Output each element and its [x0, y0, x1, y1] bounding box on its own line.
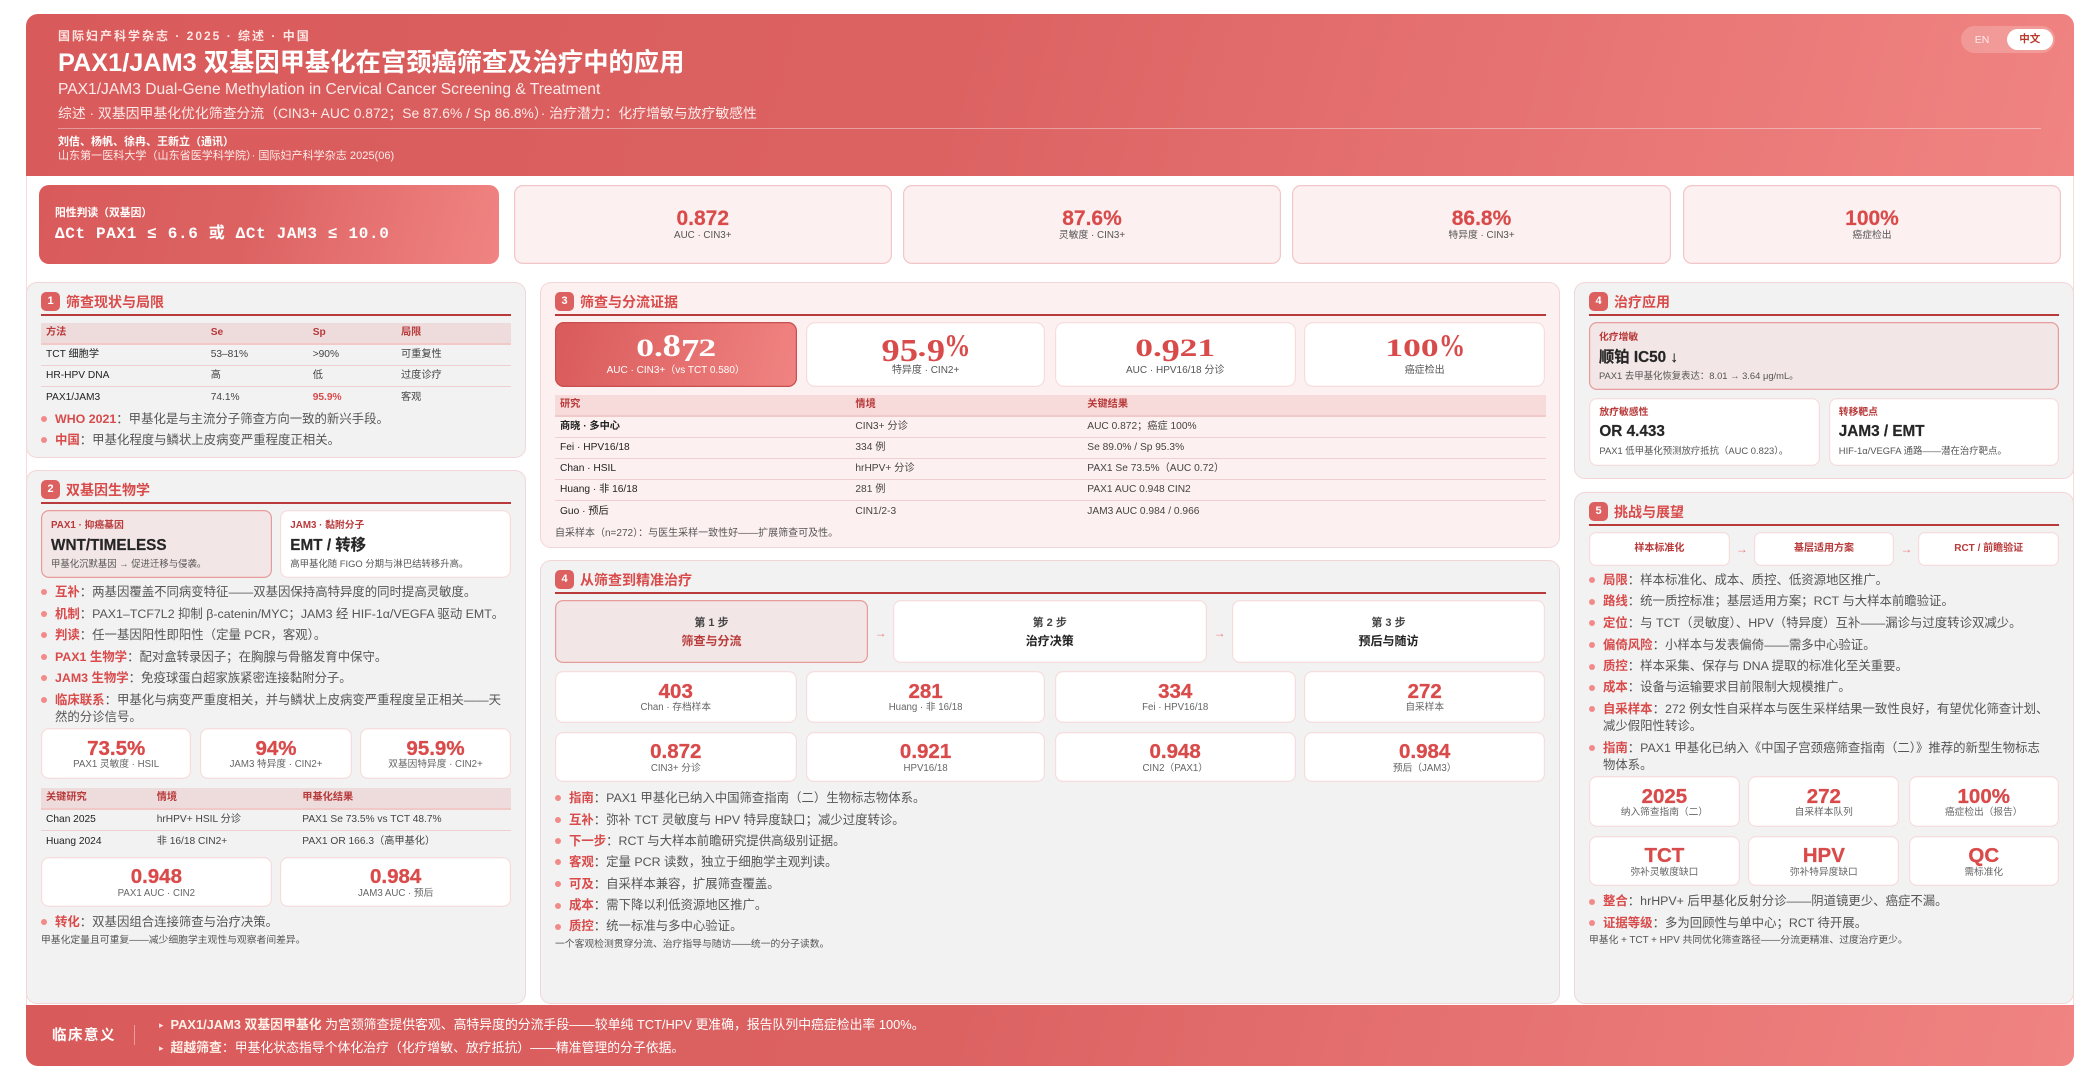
- stat: 2025: 纳入筛查指南（二）: [1621, 807, 1708, 818]
- stat: 0.948: CIN2（PAX1）: [1142, 763, 1208, 774]
- heading: [1589, 292, 2059, 316]
- stat: 272: [1304, 671, 1545, 723]
- stat: 100: 100%: [1958, 785, 2010, 808]
- heading 1: [41, 292, 511, 316]
- card: chemo sensitization: PAX1 去甲基化恢复表达：8.01 → 3.64 μg/mL。: [1599, 370, 1799, 381]
- bullet: complement: 互补：弥补 TCT 灵敏度与 HPV 特异度缺口；减少过度转诊。: [569, 812, 905, 826]
- stat: 0.921: [806, 732, 1045, 782]
- bullet: self sampling: [1589, 701, 2048, 735]
- affiliation: 山东第一医科大学（山东省医学科学院）· 国际妇产科学杂志 2025(06): [58, 150, 394, 162]
- table: studies: 334 例: [855, 442, 885, 453]
- stat: 0.948: [41, 857, 272, 907]
- flow: RCT: RCT / 前瞻验证: [1954, 543, 2023, 554]
- arrow: →: [1214, 626, 1226, 640]
- card: metastasis target: HIF-1α/VEGFA 通路——潜在治疗靶点。: [1839, 445, 2007, 456]
- big stat: 0.921: 0. 21: [1135, 335, 1215, 362]
- bullet: mechanism: 机制：PAX1–TCF7L2 抑制 β-catenin/MYC；JAM3 经 HIF-1α/VEGFA 驱动 EMT。: [55, 607, 504, 621]
- table: screening methods: PAX1/JAM3: [46, 392, 100, 402]
- step 1: 第 1 步: [694, 617, 729, 629]
- footer line 2: 超越筛查：甲基化状态指导个体化治疗（化疗增敏、放疗抵抗）——精准管理的分子依据。: [170, 1040, 684, 1055]
- step 1: [555, 600, 868, 663]
- heading 2: [41, 480, 511, 504]
- table: screening methods: 74.1%: [211, 392, 240, 402]
- bullet: self sampling: 减少假阳性转诊。: [1603, 719, 1702, 733]
- stat: 73.5: 73.5%: [87, 737, 145, 760]
- kpi: positivity criterion: [39, 185, 499, 264]
- table: studies: 研究: [560, 399, 580, 410]
- bullet: position: 定位：与 TCT（灵敏度）、HPV（特异度）互补——漏诊与过度转诊双减少。: [1603, 616, 2022, 630]
- heading 5: [1589, 502, 2059, 526]
- bullet: complement: 互补：两基因覆盖不同病变特征——双基因保持高特异度的同时提高灵敏度。: [55, 585, 476, 599]
- stat: 94: 94%: [255, 737, 296, 760]
- note: 一个客观检测贯穿分流、治疗指导与随访——统一的分子读数。: [555, 939, 829, 950]
- stat: 403: Chan · 存档样本: [640, 702, 711, 713]
- heading 3: 筛查与分流证据: [580, 294, 678, 310]
- step 2: 第 2 步: [1033, 617, 1067, 629]
- table: studies: PAX1 AUC 0.948 CIN2: [1087, 484, 1191, 495]
- flow: primary care: [1754, 532, 1894, 566]
- bullet: quality: 质控：样本采集、保存与 DNA 提取的标准化至关重要。: [1603, 659, 1908, 673]
- big stat: 0.921: AUC · HPV16/18 分诊: [1126, 365, 1224, 376]
- heading 5: 5: [1595, 505, 1602, 517]
- authors: 刘佶、杨帆、徐冉、王新立（通讯）: [58, 136, 234, 148]
- table: screening methods: HR-HPV DNA: [46, 370, 109, 381]
- bullet: JAM3 biology: JAM3 生物学：免疫球蛋白超家族紧密连接黏附分子。: [55, 671, 352, 685]
- stat: 0.984: 0.984: [1399, 740, 1450, 763]
- kpi: sensitivity: 灵敏度 · CIN3+: [1059, 230, 1125, 241]
- panel: 2 dual gene biology: [26, 470, 526, 1004]
- toggle active 中文: 中文: [2019, 33, 2040, 45]
- panel: 3 screening evidence: [540, 282, 1560, 548]
- stat: 0.948: PAX1 AUC · CIN2: [118, 888, 195, 899]
- big stat: 0.921: [1055, 322, 1296, 387]
- heading 1: 筛查现状与局限: [66, 294, 164, 310]
- bullet: clinical link: 然的分诊信号。: [55, 710, 142, 724]
- table: screening methods: 95.9%: [313, 392, 342, 402]
- card: radiotherapy sensitivity: [1589, 398, 1820, 466]
- summary line: 综述 · 双基因甲基化优化筛查分流（CIN3+ AUC 0.872；Se 87.6% / Sp 86.8%）· 治疗潜力：化疗增敏与放疗敏感性: [58, 105, 757, 121]
- table: studies: CIN3+ 分诊: [855, 421, 908, 432]
- stat: 0.984: [1304, 732, 1545, 782]
- stat: QC: 需标准化: [1964, 867, 2003, 878]
- bullet: route: 路线：统一质控标准；基层适用方案；RCT 与大样本前瞻验证。: [1603, 594, 1954, 608]
- criterion label: 阳性判读（双基因）: [55, 207, 152, 219]
- step 2: 治疗决策: [1026, 634, 1074, 648]
- big stat: 0.872: AUC · CIN3+（vs TCT 0.580）: [607, 365, 745, 376]
- table: key studies: PAX1 OR 166.3（高甲基化）: [302, 836, 435, 846]
- footer: clinical significance: [26, 1005, 2074, 1066]
- table: studies: Se 89.0% / Sp 95.3%: [1087, 442, 1184, 453]
- table: screening methods: Sp: [313, 327, 326, 338]
- heading 2: 2: [47, 483, 54, 495]
- kpi: sensitivity: [903, 185, 1281, 264]
- bullet: bias: 偏倚风险：小样本与发表偏倚——需多中心验证。: [1603, 638, 1876, 652]
- table: key studies: 非 16/18 CIN2+: [157, 836, 227, 846]
- table: key studies: 甲基化结果: [302, 792, 353, 803]
- card: metastasis target: JAM3 / EMT: [1839, 423, 1925, 440]
- stat: 100: 癌症检出（报告）: [1945, 807, 2022, 818]
- step 3: [1232, 600, 1545, 663]
- bullet: WHO: WHO 2021：甲基化是与主流分子筛查方向一致的新兴手段。: [55, 412, 389, 426]
- arrow: →: [1736, 542, 1748, 556]
- footer arrow: ▸: [159, 1043, 164, 1053]
- stat: 334: [1055, 671, 1296, 723]
- bullet: self sampling: 自采样本：272 例女性自采样本与医生采样结果一致性良好，有望优化筛查计划、: [1603, 702, 2048, 716]
- card: JAM3: EMT / 转移: [290, 537, 366, 554]
- bullet: interpretation: 判读：任一基因阳性即阳性（定量 PCR，客观）。: [55, 628, 326, 642]
- card: radiotherapy sensitivity: OR 4.433: [1599, 423, 1665, 440]
- note: 甲基化定量且可重复——减少细胞学主观性与观察者间差异。: [41, 935, 306, 946]
- table: screening methods: 客观: [401, 392, 421, 402]
- stat: 2025: 2025: [1642, 785, 1687, 808]
- card: JAM3: [280, 510, 511, 578]
- flow: RCT: [1918, 532, 2059, 566]
- card: chemo sensitization: 顺铂 IC50 ↓: [1599, 349, 1678, 366]
- stat: TCT: TCT: [1644, 844, 1684, 867]
- table: key studies: PAX1 Se 73.5% vs TCT 48.7%: [302, 814, 442, 825]
- table: screening methods: 局限: [401, 327, 421, 338]
- step 3: 预后与随访: [1358, 634, 1418, 648]
- panel: 4 treatment application: [1574, 282, 2074, 479]
- kpi: AUC: 0.872: [676, 207, 729, 230]
- bullet: guideline: 物体系。: [1603, 758, 1653, 772]
- big stat: 0.872: 7: [680, 332, 698, 368]
- stat: 95.9: [360, 728, 511, 779]
- bullet: limits: 局限：样本标准化、成本、质控、低资源地区推广。: [1603, 572, 1888, 586]
- stat: 0.984: 0.984: [370, 865, 421, 888]
- table: screening methods: [41, 323, 511, 402]
- heading 4: 从筛查到精准治疗: [580, 572, 692, 588]
- bullet: integration: 整合：hrHPV+ 后甲基化反射分诊——阴道镜更少、癌症不漏。: [1603, 894, 1948, 908]
- stat: 2025: [1589, 776, 1740, 827]
- stat: 272: [1748, 776, 1899, 827]
- bullet: evidence level: 证据等级：多为回顾性与单中心；RCT 待开展。: [1603, 916, 1867, 930]
- stat: 403: 403: [659, 680, 693, 703]
- big stat: 0.921: 9: [1162, 332, 1180, 368]
- card: metastasis target: 转移靶点: [1839, 407, 1878, 418]
- kpi: specificity: [1292, 185, 1671, 264]
- panel: 4 from screening to precision treatment: [540, 560, 1560, 1004]
- kpi: sensitivity: 87.6%: [1062, 207, 1122, 230]
- big stat: 95.9: 9: [926, 332, 944, 368]
- stat: 272: 自采样本: [1405, 702, 1444, 713]
- big stat: 100: %: [1438, 327, 1464, 363]
- table: screening methods: 53–81%: [211, 349, 248, 360]
- stat: 0.921: 0.921: [900, 740, 951, 763]
- table: studies: AUC 0.872；癌症 100%: [1087, 421, 1197, 432]
- step 1: 筛查与分流: [681, 634, 742, 648]
- panel: 1 screening status: [26, 282, 526, 458]
- stat: 0.948: 0.948: [1150, 740, 1201, 763]
- big stat: 0.872: 8: [662, 327, 680, 363]
- table: studies: 281 例: [855, 484, 885, 495]
- table: key studies: Huang 2024: [46, 836, 102, 846]
- stat: 95.9: 95.9%: [406, 737, 465, 760]
- table: studies: hrHPV+ 分诊: [855, 463, 915, 474]
- table: screening methods: 可重复性: [401, 349, 442, 360]
- english subtitle: PAX1/JAM3 Dual-Gene Methylation in Cervical Cancer Screening & Treatment: [58, 81, 600, 98]
- bullet: China: 中国：甲基化程度与鳞状上皮病变严重程度正相关。: [55, 432, 340, 446]
- card: chemo sensitization: [1589, 322, 2059, 390]
- criterion formula: ΔCt PAX1 ≤ 6.6 或 ΔCt JAM3 ≤ 10.0: [55, 225, 389, 243]
- heading 1: 1: [47, 295, 54, 307]
- heading: 治疗应用: [1614, 294, 1670, 310]
- bullet: objective: 客观：定量 PCR 读数，独立于细胞学主观判读。: [569, 855, 837, 869]
- table: studies: Guo · 预后: [560, 506, 609, 516]
- table: screening methods: Se: [211, 327, 223, 338]
- big stat: 95.9: 特异度 · CIN2+: [892, 365, 959, 376]
- heading 3: [555, 292, 1546, 316]
- big stat: 100: [1304, 322, 1545, 387]
- kpi: AUC: AUC · CIN3+: [674, 230, 731, 241]
- stat: TCT: 弥补灵敏度缺口: [1630, 867, 1698, 878]
- bullet: quality: 质控：统一标准与多中心验证。: [569, 919, 742, 933]
- big stat: 95.9: %: [943, 327, 970, 363]
- stat: 0.948: 0.948: [131, 865, 182, 888]
- table: studies: Chan · HSIL: [560, 463, 616, 474]
- flow: primary care: 基层适用方案: [1794, 543, 1854, 554]
- heading 5: 挑战与展望: [1614, 504, 1684, 520]
- card: PAX1: PAX1 · 抑癌基因: [51, 520, 124, 531]
- header banner: [26, 14, 2074, 176]
- bullet: translation: 转化：双基因组合连接筛查与治疗决策。: [55, 915, 278, 929]
- card: radiotherapy sensitivity: 放疗敏感性: [1599, 407, 1648, 418]
- bullet: clinical link: 临床联系：甲基化与病变严重度相关，并与鳞状上皮病变严重程度呈正相关——天: [55, 693, 501, 707]
- card: PAX1: WNT/TIMELESS: [51, 537, 167, 554]
- main title: PAX1/JAM3 双基因甲基化在宫颈癌筛查及治疗中的应用: [58, 49, 684, 77]
- card: metastasis target: [1829, 398, 2059, 466]
- card: JAM3: JAM3 · 黏附分子: [290, 520, 364, 531]
- stat: 281: 281: [908, 680, 943, 703]
- table: screening methods: >90%: [313, 349, 339, 360]
- table: studies: 关键结果: [1087, 399, 1128, 410]
- stat: QC: [1908, 836, 2059, 886]
- table: studies: Huang · 非 16/18: [560, 484, 638, 495]
- table: studies: [555, 395, 1546, 516]
- toggle EN: EN: [1975, 34, 1989, 46]
- stat: 100: [1908, 776, 2059, 827]
- stat: 334: Fei · HPV16/18: [1142, 702, 1208, 713]
- stat: 272: 272: [1807, 785, 1841, 808]
- stat: HPV: [1748, 836, 1899, 886]
- stat: 281: Huang · 非 16/18: [889, 702, 962, 713]
- bullet: guideline: [1589, 740, 2040, 774]
- table: studies: PAX1 Se 73.5%（AUC 0.72）: [1087, 463, 1224, 474]
- note: 甲基化 + TCT + HPV 共同优化筛查路径——分流更精准、过度治疗更少。: [1589, 935, 1908, 946]
- kpi: specificity: 86.8%: [1452, 207, 1511, 230]
- stat: 94: [200, 728, 352, 779]
- stat: 0.984: 预后（JAM3）: [1393, 763, 1456, 774]
- stat: 403: [555, 671, 796, 723]
- big stat: 100: 100: [1385, 335, 1439, 362]
- table: studies: JAM3 AUC 0.984 / 0.966: [1087, 506, 1199, 516]
- flow: sample standardization: [1589, 532, 1730, 566]
- heading 3: 3: [561, 295, 568, 307]
- card: PAX1: 甲基化沉默基因 → 促进迁移与侵袭。: [51, 558, 206, 569]
- big stat: 95.9: 5: [899, 332, 917, 368]
- stat: 0.921: HPV16/18: [904, 763, 948, 774]
- table: studies: CIN1/2-3: [855, 506, 896, 516]
- stat: 94: JAM3 特异度 · CIN2+: [230, 759, 322, 770]
- arrow: →: [875, 626, 887, 640]
- bullet: accessible: 可及：自采样本兼容，扩展筛查覆盖。: [569, 877, 780, 891]
- footer line 1: PAX1/JAM3 双基因甲基化 为宫颈筛查提供客观、高特异度的分流手段——较单纯 TCT/HPV 更准确，报告队列中癌症检出率 100%。: [170, 1017, 925, 1032]
- step 2: [893, 600, 1206, 663]
- table: key studies: Chan 2025: [46, 814, 96, 825]
- table: key studies: 关键研究: [46, 792, 87, 803]
- bullet: cost: 成本：需下降以利低资源地区推广。: [569, 898, 767, 912]
- flow: sample standardization: 样本标准化: [1634, 543, 1684, 554]
- kpi: specificity: 特异度 · CIN3+: [1448, 230, 1515, 241]
- note: 自采样本（n=272）：与医生采样一致性好——扩展筛查可及性。: [555, 528, 838, 539]
- language toggle: [1961, 26, 2055, 53]
- footer label: 临床意义: [52, 1028, 116, 1044]
- big stat: 95.9: .: [917, 335, 926, 362]
- stat: 73.5: PAX1 灵敏度 · HSIL: [73, 759, 159, 770]
- stat: TCT: [1589, 836, 1740, 886]
- table: screening methods: 方法: [46, 327, 66, 338]
- table: key studies: [41, 788, 511, 846]
- stat: 272: 272: [1408, 680, 1442, 703]
- bullet: clinical link: [41, 692, 501, 726]
- stat: 334: 334: [1158, 680, 1192, 703]
- kpi: cancer detection: 100%: [1845, 207, 1899, 230]
- kpi: cancer detection: 癌症检出: [1852, 230, 1892, 241]
- bullet: PAX1 biology: PAX1 生物学：配对盒转录因子；在胸腺与骨骼发育中保守。: [55, 650, 387, 664]
- kpi: cancer detection: [1683, 185, 2061, 264]
- stat: 0.872: [555, 732, 796, 782]
- table: key studies: 情境: [157, 792, 177, 803]
- stat: 281: [806, 671, 1045, 723]
- bullet: guideline: 指南：PAX1 甲基化已纳入《中国子宫颈癌筛查指南（二）》推荐的新型生物标志: [1603, 741, 2040, 755]
- card: chemo sensitization: 化疗增敏: [1599, 332, 1638, 343]
- panel: 5 challenges and outlook: [1574, 492, 2074, 1004]
- bullet: guideline: 指南：PAX1 甲基化已纳入中国筛查指南（二）生物标志物体系。: [569, 791, 925, 805]
- step 3: 第 3 步: [1371, 617, 1406, 629]
- table: studies: Fei · HPV16/18: [560, 442, 630, 453]
- heading 4: 4: [561, 573, 568, 585]
- table: screening methods: 低: [313, 370, 323, 381]
- bullet: next step: 下一步：RCT 与大样本前瞻研究提供高级别证据。: [569, 834, 846, 848]
- footer arrow: ▸: [159, 1020, 164, 1030]
- heading 4: [555, 570, 1546, 594]
- big stat: 0.872: [555, 322, 796, 387]
- stat: HPV: HPV: [1803, 844, 1845, 867]
- stat: HPV: 弥补特异度缺口: [1790, 867, 1858, 878]
- toggle active 中文: [2006, 29, 2053, 50]
- table: key studies: hrHPV+ HSIL 分诊: [157, 814, 241, 825]
- stat: 0.984: JAM3 AUC · 预后: [358, 888, 433, 899]
- stat: 0.948: [1055, 732, 1296, 782]
- stat: QC: QC: [1968, 844, 1999, 867]
- bullet: cost: 成本：设备与运输要求目前限制大规模推广。: [1603, 680, 1851, 694]
- stat: 0.872: 0.872: [650, 740, 701, 763]
- stat: 272: 自采样本队列: [1795, 807, 1853, 818]
- table: screening methods: 高: [211, 370, 221, 381]
- table: studies: 商晓 · 多中心: [560, 421, 620, 432]
- stat: 73.5: [41, 728, 191, 779]
- big stat: 95.9: [806, 322, 1045, 387]
- big stat: 95.9: 9: [882, 332, 900, 368]
- card: JAM3: 高甲基化随 FIGO 分期与淋巴结转移升高。: [290, 558, 468, 569]
- heading: 4: [1595, 295, 1602, 307]
- stat: 95.9: 双基因特异度 · CIN2+: [388, 759, 483, 770]
- card: PAX1: [41, 510, 272, 578]
- big stat: 0.872: 0. 2: [636, 335, 716, 362]
- card: radiotherapy sensitivity: PAX1 低甲基化预测放疗抵抗（AUC 0.823）。: [1599, 445, 1788, 456]
- eyebrow: 国际妇产科学杂志 · 2025 · 综述 · 中国: [58, 29, 311, 43]
- stat: 0.984: [280, 857, 511, 907]
- heading 2: 双基因生物学: [66, 482, 150, 498]
- stat: 0.872: CIN3+ 分诊: [651, 763, 701, 774]
- big stat: 100: 癌症检出: [1405, 365, 1445, 376]
- table: studies: 情境: [855, 399, 876, 410]
- arrow: →: [1900, 542, 1912, 556]
- table: screening methods: 过度诊疗: [401, 370, 442, 381]
- kpi: AUC: [514, 185, 892, 264]
- table: screening methods: TCT 细胞学: [46, 349, 99, 360]
